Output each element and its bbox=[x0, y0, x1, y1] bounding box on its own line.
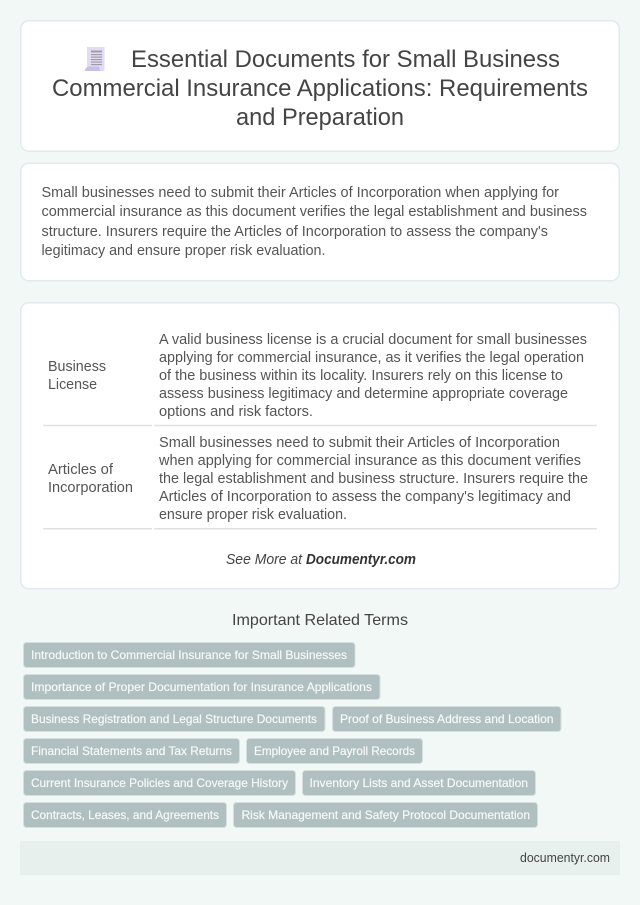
chip bbox=[246, 738, 422, 764]
description: business license: options and risk factors. bbox=[159, 404, 313, 420]
chip: Proof of Business Address and Location bbox=[340, 712, 554, 726]
panel: introduction bbox=[21, 163, 619, 281]
chip bbox=[24, 738, 240, 764]
label: articles of incorporation: Incorporation bbox=[48, 480, 133, 496]
see more link: Documentyr.com bbox=[306, 552, 416, 568]
label: business license: License bbox=[48, 377, 97, 393]
panel: document table bbox=[21, 303, 619, 589]
intro text block bbox=[42, 185, 587, 259]
description: articles of incorporation: the legal establishment and business structure. Insurers require the bbox=[159, 471, 588, 487]
chip bbox=[234, 802, 538, 828]
icon: document scroll bbox=[85, 47, 104, 71]
see more link bbox=[226, 552, 416, 568]
chip: Business Registration and Legal Structure Documents bbox=[31, 712, 317, 726]
description: business license: assess business legitimacy and determine appropriate coverage bbox=[159, 386, 568, 402]
description: articles of incorporation bbox=[158, 435, 588, 523]
chip bbox=[24, 706, 325, 732]
footer bar: documentyr.com bbox=[520, 850, 610, 865]
title bbox=[52, 46, 588, 131]
label: articles of incorporation: Articles of bbox=[48, 462, 114, 478]
chip bbox=[24, 642, 355, 668]
chip: Risk Management and Safety Protocol Documentation bbox=[242, 808, 530, 822]
description: business license: of the business within its locality. Insurers rely on this license to bbox=[159, 368, 563, 384]
label: articles of incorporation bbox=[48, 462, 133, 496]
related terms chips bbox=[24, 642, 561, 828]
chip: Inventory Lists and Asset Documentation bbox=[310, 776, 528, 790]
description: business license bbox=[159, 332, 587, 420]
title: Essential Documents for Small Business bbox=[131, 46, 560, 73]
chip: Importance of Proper Documentation for Insurance Applications bbox=[31, 680, 372, 694]
chip bbox=[24, 674, 380, 700]
intro text block: legitimacy and ensure proper risk evaluation. bbox=[42, 243, 326, 259]
description: business license: applying for commercial insurance, as it verifies the legal operation bbox=[159, 350, 584, 366]
title: Commercial Insurance Applications: Requirements bbox=[52, 75, 588, 102]
heading: important related terms: Important Related Terms bbox=[232, 612, 408, 629]
label: business license bbox=[48, 359, 106, 393]
description: articles of incorporation: Small businesses need to submit their Articles of Incorporation bbox=[159, 435, 560, 451]
description: articles of incorporation: ensure proper risk evaluation. bbox=[159, 507, 347, 523]
description: articles of incorporation: Articles of Incorporation to assess the company's legitimacy and bbox=[159, 489, 571, 505]
chip: Contracts, Leases, and Agreements bbox=[31, 808, 219, 822]
chip bbox=[332, 706, 561, 732]
title: and Preparation bbox=[236, 104, 404, 131]
intro text block: commercial insurance as this document verifies the legal establishment and business bbox=[42, 204, 587, 220]
chip bbox=[302, 770, 536, 796]
row: business license bbox=[48, 332, 587, 420]
see more link: See More at bbox=[226, 552, 303, 568]
intro text block: structure. Insurers require the Articles of Incorporation to assess the company's bbox=[42, 224, 548, 240]
chip: Introduction to Commercial Insurance for Small Businesses bbox=[31, 648, 347, 662]
description: business license: A valid business license is a crucial document for small businesses bbox=[159, 332, 587, 348]
footer bar bbox=[20, 841, 620, 875]
panel: title card bbox=[21, 21, 619, 151]
chip: Current Insurance Policies and Coverage History bbox=[31, 776, 288, 790]
row: articles of incorporation bbox=[48, 435, 588, 523]
chip: Financial Statements and Tax Returns bbox=[31, 744, 232, 758]
chip bbox=[24, 770, 296, 796]
intro text block: Small businesses need to submit their Articles of Incorporation when applying for bbox=[42, 185, 559, 201]
label: business license: Business bbox=[48, 359, 106, 375]
chip: Employee and Payroll Records bbox=[254, 744, 415, 758]
chip bbox=[24, 802, 226, 828]
description: articles of incorporation: when applying for commercial insurance as this document verifies bbox=[158, 453, 581, 469]
